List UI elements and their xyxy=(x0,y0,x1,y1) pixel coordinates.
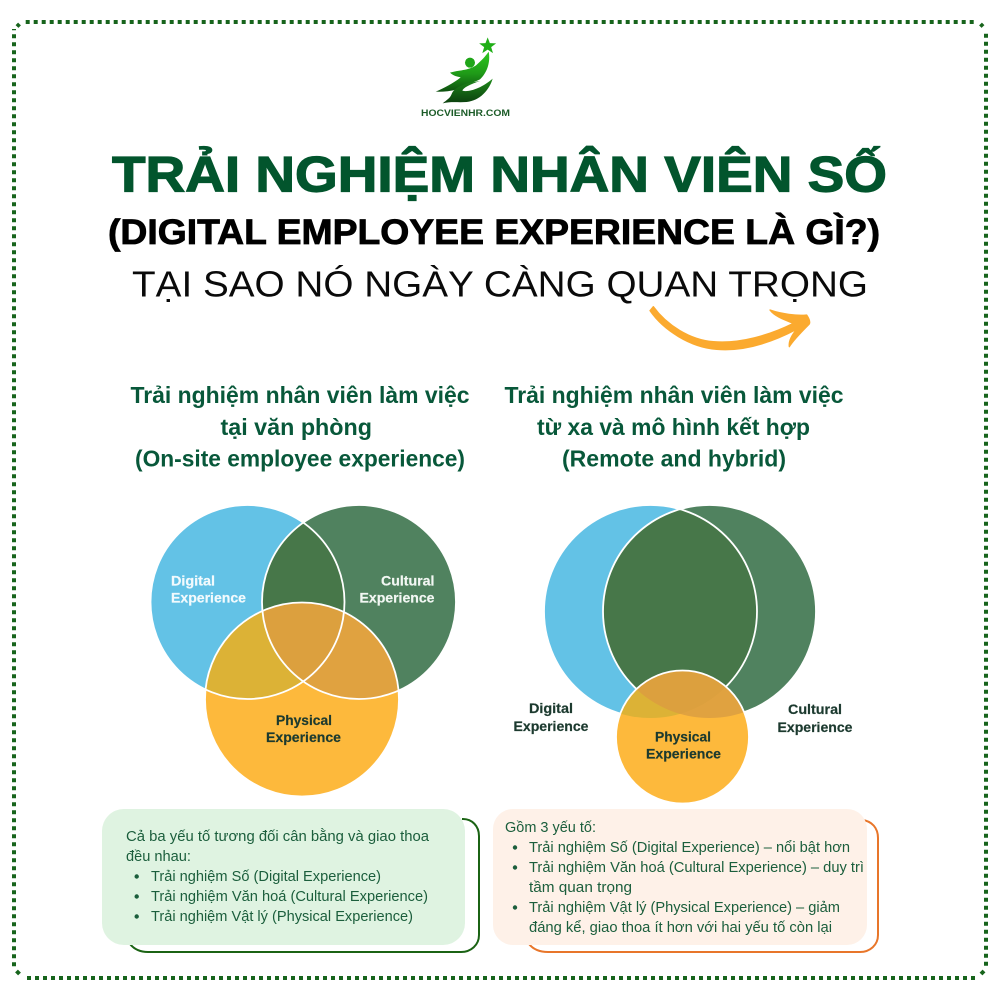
card text: Trải nghiệm Văn hoá (Cultural Experience) xyxy=(151,889,428,905)
card text: đáng kể, giao thoa ít hơn với hai yếu tố còn lại xyxy=(529,920,832,936)
overlap: digital and cultural xyxy=(604,510,756,688)
label: cultural: Cultural xyxy=(381,574,434,589)
label: digital xyxy=(514,701,589,734)
circle: cultural xyxy=(603,505,816,718)
subtitle: (DIGITAL EMPLOYEE EXPERIENCE LÀ GÌ?) xyxy=(108,212,880,252)
label: digital: Digital xyxy=(529,701,573,716)
overlap: digital and physical xyxy=(206,612,302,698)
label: cultural: Cultural xyxy=(788,702,842,717)
card outline xyxy=(130,819,479,952)
card text xyxy=(126,828,430,925)
heading: on-site: Trải nghiệm nhân viên làm việc xyxy=(130,382,470,408)
heading: on-site: (On-site employee experience) xyxy=(135,446,465,472)
overlap: all three xyxy=(603,505,816,718)
title: TRẢI NGHIỆM NHÂN VIÊN SỐ xyxy=(112,146,887,202)
card text: Trải nghiệm Vật lý (Physical Experience) – giảm xyxy=(529,900,840,916)
card text: Trải nghiệm Văn hoá (Cultural Experience) – duy trì xyxy=(529,860,864,876)
label: physical xyxy=(646,730,722,762)
card text: Trải nghiệm Số (Digital Experience) – nổi bật hơn xyxy=(529,840,850,856)
label: physical: Physical xyxy=(276,713,332,728)
heading: on-site: tại văn phòng xyxy=(220,414,372,440)
card text: đều nhau: xyxy=(126,849,191,865)
tagline: TẠI SAO NÓ NGÀY CÀNG QUAN TRỌNG xyxy=(132,264,868,304)
heading: remote and hybrid: (Remote and hybrid) xyxy=(562,446,786,472)
logo xyxy=(421,37,510,119)
label: physical: Experience xyxy=(646,746,722,762)
overlap: cultural and physical xyxy=(680,688,744,718)
circle: physical xyxy=(616,670,749,804)
card text xyxy=(505,820,864,936)
logo wordmark: HOCVIENHR.COM xyxy=(421,108,510,119)
label: physical: Physical xyxy=(655,730,711,744)
label: digital: Experience xyxy=(171,591,247,606)
heading: on-site xyxy=(130,382,470,472)
circle: cultural xyxy=(262,505,456,699)
overlap: digital and physical xyxy=(621,690,680,718)
label: physical: Experience xyxy=(266,730,342,745)
label: digital: Experience xyxy=(514,719,589,734)
overlap: all three xyxy=(262,505,456,699)
label: physical xyxy=(266,713,342,745)
card text: Trải nghiệm Vật lý (Physical Experience) xyxy=(151,909,413,925)
arrow xyxy=(650,307,810,350)
label: cultural: Experience xyxy=(360,591,435,606)
label: digital: Digital xyxy=(171,574,215,589)
circle: physical xyxy=(205,602,399,796)
card background xyxy=(493,809,867,945)
label: cultural xyxy=(778,702,853,735)
venn diagram: remote and hybrid xyxy=(514,505,853,804)
circle: digital xyxy=(544,505,757,718)
label: cultural: Experience xyxy=(778,720,853,735)
venn diagram: on-site xyxy=(150,505,456,796)
label: cultural xyxy=(360,574,435,606)
card text: Cả ba yếu tố tương đối cân bằng và giao thoa xyxy=(126,828,430,845)
card text: Trải nghiệm Số (Digital Experience) xyxy=(151,869,381,885)
circle: digital xyxy=(150,505,344,699)
heading: remote and hybrid xyxy=(504,382,844,472)
card text: Gồm 3 yếu tố: xyxy=(505,820,596,836)
heading: remote and hybrid: Trải nghiệm nhân viên làm việc xyxy=(504,382,844,408)
label: digital xyxy=(171,574,247,606)
panel: on-site note xyxy=(102,809,479,952)
heading: remote and hybrid: từ xa và mô hình kết hợp xyxy=(537,414,810,440)
panel: remote note xyxy=(493,809,878,952)
icon: logo mark xyxy=(436,37,496,103)
card background xyxy=(102,809,465,945)
card outline xyxy=(529,820,878,952)
card text: tầm quan trọng xyxy=(529,880,632,896)
overlap: cultural and physical xyxy=(305,614,398,698)
overlap: digital and cultural xyxy=(263,524,344,610)
